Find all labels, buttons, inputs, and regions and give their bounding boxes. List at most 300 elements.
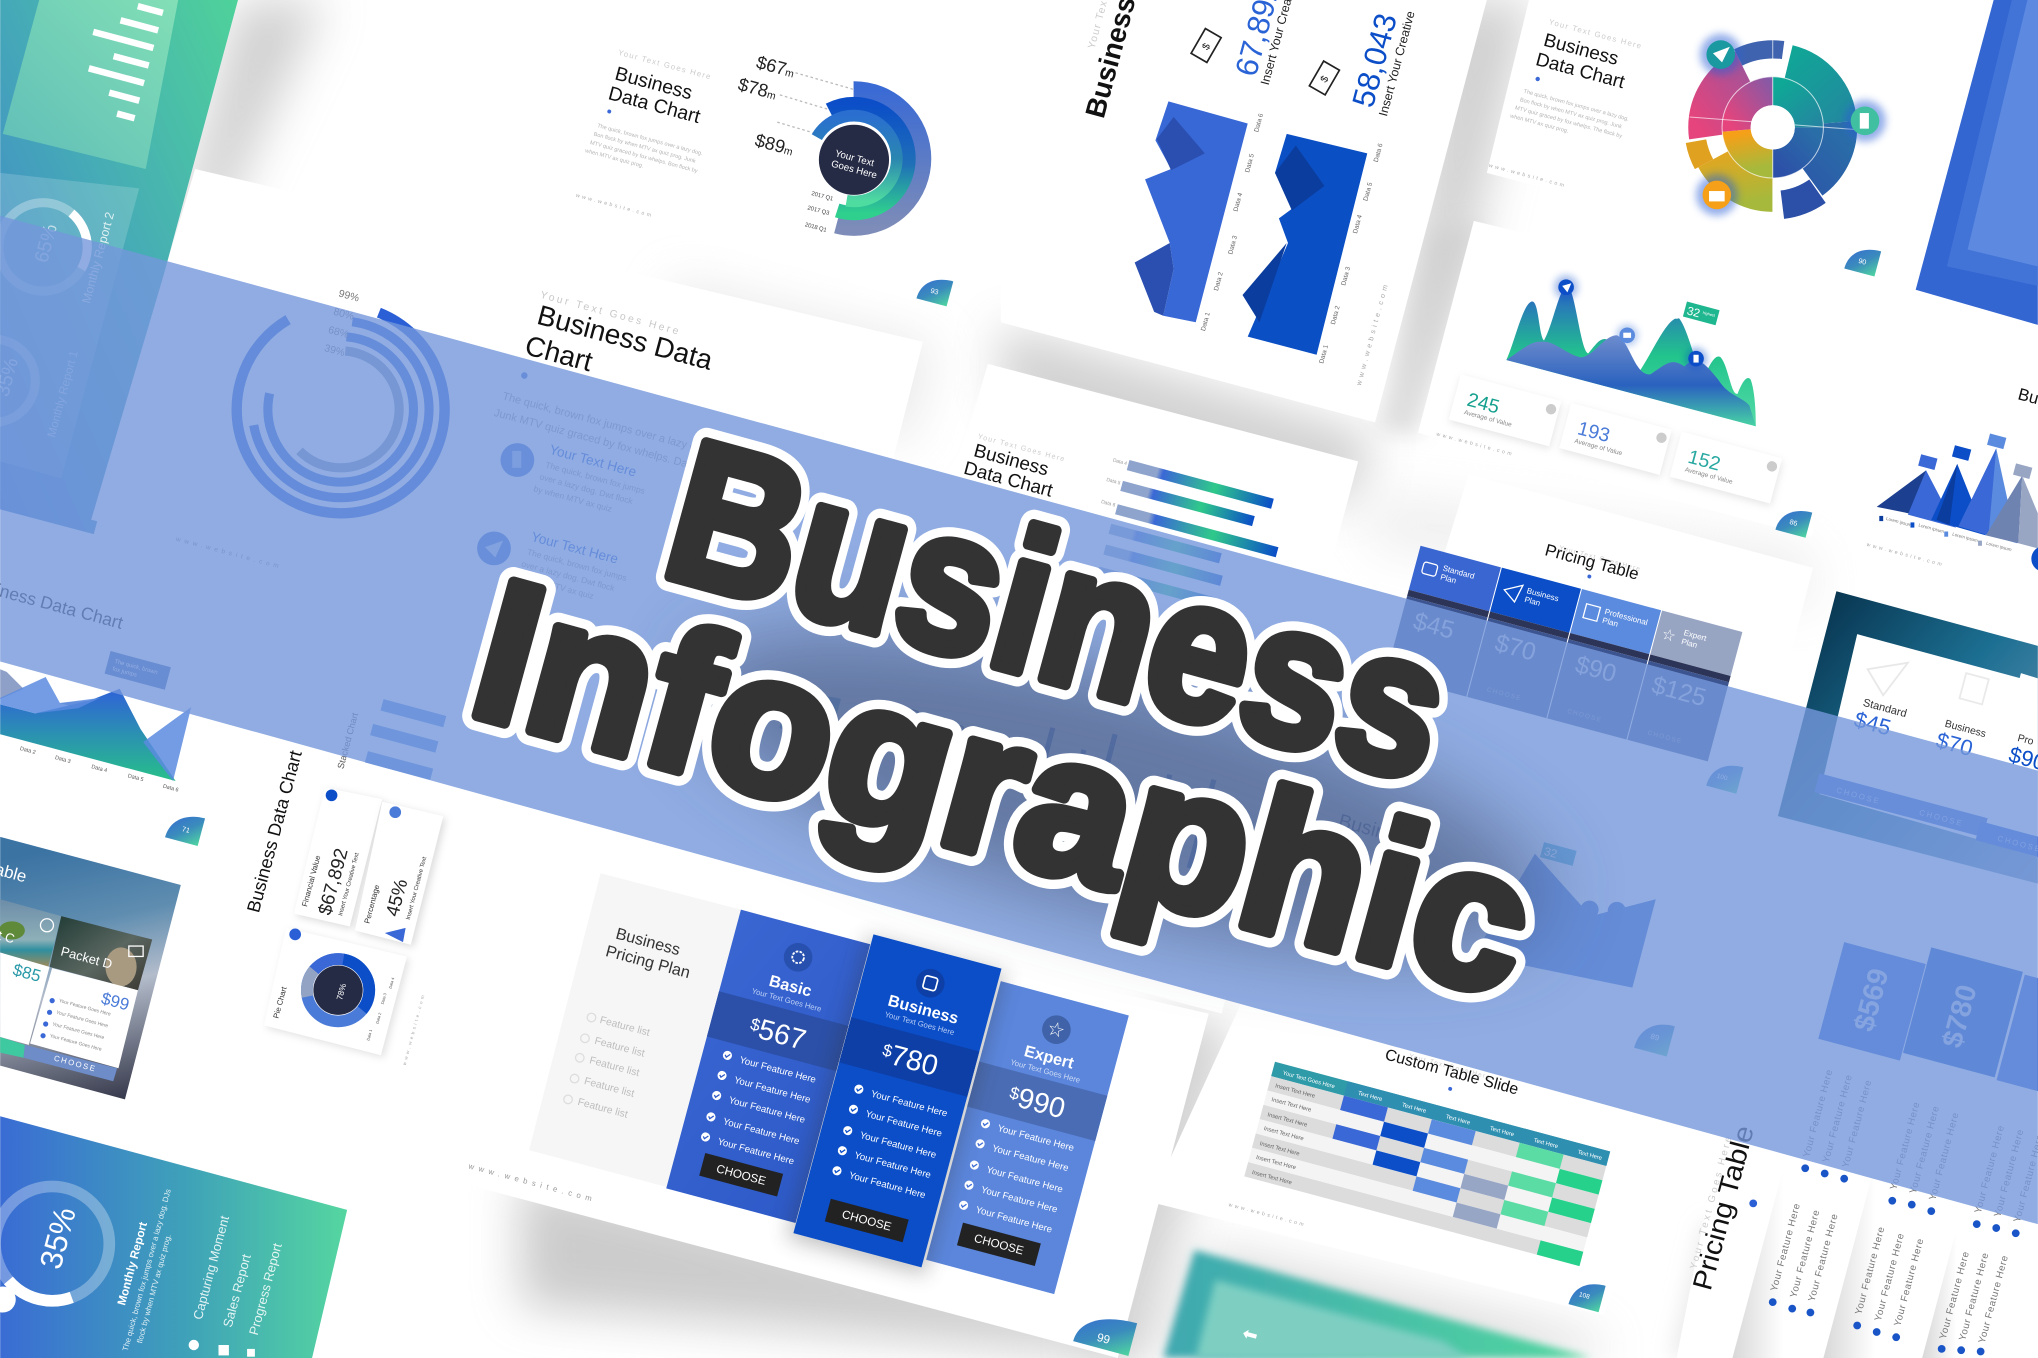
website: www.website.com [1436,431,1515,458]
subtitle: Your Text Goes Here [1688,1133,1735,1270]
choose bar third [1976,821,2038,860]
text: choose: CHOOSE [53,1054,98,1074]
legend: Lorem ipsum [1886,516,1912,528]
heading: Data Chart [1534,48,1628,92]
axis labels: 2017 Q1 [811,191,834,203]
plan: expert: Your Feature Here [974,1205,1053,1236]
page tab 89: 89 [1650,1032,1660,1043]
plan: business: Your Feature Here [870,1089,949,1120]
choose bar: CHOOSE [1835,786,1882,806]
marker: plane [1554,275,1578,299]
table [1244,1062,1610,1266]
plan: basic: Basic [767,972,814,1001]
choose bar: CHOOSE [1918,808,1964,828]
inner blue layer [1947,0,2038,286]
axis labels: Data 6 [1253,112,1265,133]
text: description: flock by when MTV ax quiz prog. [135,1233,173,1344]
panel: bars card [3,0,178,169]
column: standard: Plan [1439,572,1457,585]
marker circle [2031,546,2038,572]
axis labels [804,191,834,234]
panel: concentric rings slide [91,169,923,742]
photo: packet d [50,916,152,990]
plan: basic: 567 [755,1014,809,1057]
panel: sunburst slide [1487,0,1931,277]
table: Insert Text Here [1274,1083,1316,1100]
item 1 [533,441,651,521]
features list [40,998,112,1053]
choose bar [24,1045,117,1081]
feature list column [529,873,741,1188]
value bubbles [1918,433,2032,479]
features column 1: Your Feature Here [1892,1237,1926,1328]
legend: Lorem ipsum [1952,532,1979,543]
heading: Pricing Plan [604,942,692,982]
heading: Your Text Goes Here [977,432,1066,464]
pricing table [1386,546,1742,761]
photo: packet c [0,899,61,967]
card: pie chart: 78% [334,982,348,1001]
column: expert: Expert [1683,628,1708,643]
features column 1: Your Feature Here [1769,1202,1803,1293]
legend: Lorem ipsum [1918,522,1945,534]
panel: slide 71 area chart [0,572,228,846]
page tab 100: 100 [1716,773,1729,782]
features column 1: Your Feature Here [1957,1251,1991,1342]
stat card 193 [1559,403,1673,478]
website: www.website.com [1355,281,1390,387]
column: business: $70 [1492,630,1539,667]
icon: book [500,443,534,477]
text: standard: Standard [1862,697,1908,720]
nav: capturing moment: Capturing Moment [190,1214,232,1321]
heading: The quick, brown fox jumps over a lazy dog. [1523,89,1630,123]
page tab 93 [916,273,953,306]
page tab 93: 93 [930,287,939,297]
icon: thumb outline [1959,673,1989,704]
heading: Custom Table Slide [1383,1047,1520,1099]
column body 2 [1823,1051,1996,1358]
panel: horizontal bars slide [897,364,1358,780]
item 1: Your Text Here [548,442,638,480]
axis labels: Data 4 [1232,192,1244,212]
features list: Your Feature Goes Here [52,1021,105,1041]
heading: MTV quiz graced by fox whelps. The flock by [1514,105,1623,140]
table: Insert Text Here [1271,1097,1312,1114]
axis labels: Data 2 [1330,305,1342,325]
stat card 245: 245 [1465,389,1502,419]
heading: www.website.com [575,193,654,219]
green bar [0,1037,25,1058]
website: www.website.com [174,536,283,571]
table: Insert Text Here [1263,1126,1304,1142]
column: professional: CHOOSE [1566,708,1603,724]
plan: basic: Your Feature Here [722,1116,801,1147]
legend: Data 4 [387,976,395,989]
features column 1: Your Feature Here [1908,1105,1942,1195]
heading: Your Text Goes Here [617,48,713,81]
card: financial value: Financial Value [300,854,322,908]
axis labels [19,746,179,794]
bar chart [1033,728,1214,873]
icon: money note 2 [1309,61,1339,95]
heading: Pricing Table [1686,1122,1760,1293]
title line: Business: Business [646,398,1470,824]
panel: standard pricing slide [1778,591,2038,884]
area chart [0,669,191,781]
column: business: Business [1526,586,1560,603]
plan: business: Your Feature Here [853,1150,932,1181]
page tab 99: 99 [1095,1331,1111,1347]
column: expert: Plan [1680,637,1698,650]
column: professional [1558,602,1649,729]
area chart 2 [1243,134,1367,355]
area chart 1 [1135,101,1248,322]
axis labels: Data 5 [1244,153,1256,173]
plan: basic: Your Text Goes Here [751,986,822,1014]
table: Insert Text Here [1255,1155,1296,1171]
text: business [1933,718,1987,764]
choose bar [1814,773,1988,837]
bar chart [1097,460,1278,608]
column: standard [1396,559,1476,682]
panel: monthly report bottom left [0,1116,347,1358]
plan: business: CHOOSE [840,1208,893,1234]
page tab 94: 94 [801,706,817,722]
features column 1: Your Feature Here [1853,1225,1887,1316]
feature list: Feature list [598,1015,651,1039]
table colored cells [1317,1096,1606,1266]
table: Text Here [1577,1150,1602,1162]
features column 1: Your Feature Here [1801,1068,1836,1159]
panel: pyramid slide [1851,331,2038,585]
column: standard: Standard [1442,564,1476,581]
column: standard: CHOOSE [1406,665,1442,681]
column body 1 [1732,1038,1903,1358]
heading [604,923,697,982]
panel: far right blue slide [1916,0,2038,325]
donut chart: Goes Here [830,159,878,181]
features column 1: Your Feature Here [1888,1101,1923,1191]
table: Text Here [1357,1091,1383,1103]
icon: money note 1: $ [1201,42,1213,52]
plan: expert: Your Feature Here [985,1165,1064,1195]
table: Text Here [1489,1126,1515,1138]
heading: The quick, brown fox jumps over a lazy dog. [596,123,704,157]
features column 1: Your Feature Here [1788,1208,1823,1299]
heading: Business [614,925,682,959]
heading: Business [1336,810,1418,852]
caption: Insert Your Creative [1376,9,1418,118]
plan: business: Your Feature Here [859,1130,937,1161]
legend: Data 3 [380,992,387,1005]
column body 3 [1922,1080,2038,1358]
page tab 86: 86 [1789,518,1798,528]
stacked bars [365,699,446,780]
website: www.website.com [1228,1202,1307,1229]
plan: expert: Your Feature Here [980,1185,1059,1216]
stat card 245: Average of Value [1463,409,1513,429]
icon: plane [477,532,511,565]
axis labels: Data 3 [1340,266,1352,286]
marker: book [1686,348,1706,369]
flag: 32 [1543,845,1558,861]
leader lines [777,73,868,133]
card: pie chart: Pie Chart [272,985,289,1019]
heading: Business Data [534,299,716,376]
nav: sales report: Sales Report [220,1252,254,1329]
feature list: Feature list [588,1055,641,1079]
title banner band [0,216,2038,1224]
plan: business: Your Feature Here [848,1170,927,1201]
bar labels: Data 4 [1112,457,1128,467]
bar labels [1100,457,1128,509]
axis labels: Data 3 [54,755,71,765]
features column 1: Your Feature Here [1821,1073,1855,1164]
panel: vertical bar slide under title [832,676,1280,1014]
value: 78m: $78m [736,74,779,104]
heading: Junk MTV quiz graced by fox whelps. Dad [493,407,695,472]
panel: custom table slide [1150,1003,1677,1315]
donut chart [294,946,382,1034]
axis labels: Data 1 [1318,344,1330,364]
stat card 152 [1669,431,1783,506]
features list: Your Feature Goes Here [56,1010,109,1029]
card: pie chart [264,928,410,1058]
flag: 32 highest value: 32 [1685,304,1701,320]
column: expert: ☆ [1660,626,1678,646]
icon: plane outline [1868,663,1908,695]
stat card 193: 193 [1575,417,1612,447]
panel: pricing table slide [1386,474,1813,819]
card: third [1978,673,2038,845]
column 2: $780 [1936,981,1984,1051]
features column 1: Your Feature Here [1938,1250,1972,1341]
panel: ring card [0,173,139,478]
plan: expert: 990 [1014,1082,1069,1125]
column 3 [1997,975,2038,1105]
website: www.website.com [1866,542,1945,568]
axis labels: Data 5 [1362,181,1374,202]
plan: expert: Your Feature Here [991,1143,1070,1174]
item 1: The quick, brown fox jumps [544,460,646,496]
text: business: Business [1943,719,1987,740]
axis labels [1200,112,1385,364]
axis labels: Data 2 [19,746,36,756]
page tab 108 [1568,1278,1606,1312]
panel: slide business area charts [1001,0,1487,422]
plan: expert: $ [1008,1083,1022,1104]
axis labels: 2017 Q3 [807,205,830,217]
plan: basic [666,910,870,1223]
heading [572,46,724,228]
column: expert: CHOOSE [1647,730,1683,746]
text: business: $70 [1933,727,1976,761]
ring labels: 99% [337,289,360,305]
column: business: CHOOSE [1486,686,1522,703]
axis labels: 2018 Q1 [804,222,827,234]
plan: expert: CHOOSE [973,1232,1025,1258]
label: monthly report 1: Monthly Report 1 [45,349,81,439]
panel: slide 93 donut [559,0,1001,308]
marker [1580,901,1599,919]
nav: progress report: Progress Report [246,1241,285,1337]
feature list: Feature list [583,1076,635,1100]
donut: 65 percent [0,203,87,291]
heading: Business [905,705,987,747]
features column 1: Your Feature Here [1873,1232,1907,1322]
axis labels: Data 2 [1213,271,1225,292]
pyramid chart [1877,448,2038,548]
page tab 90: 90 [1857,257,1867,267]
panel: data cards slide [195,699,484,1080]
feature list: Feature list [593,1036,646,1060]
column 1 [1818,942,1926,1061]
features column 1: Your Feature Here [1807,1212,1841,1303]
icon: book [1844,100,1886,142]
price 85: $85 [11,960,43,986]
label: monthly report 2: Monthly Report 2 [79,210,117,305]
heading: Your Text Goes Here [1558,545,1642,573]
axis labels: Data 3 [1227,235,1239,255]
heading: The quick, brown fox jumps over a lazy dog. [501,390,712,458]
stat card 245 [1448,374,1563,449]
panel: monthly report left [0,0,238,534]
plan: business: 780 [887,1039,941,1083]
heading [493,286,740,475]
photo: person [105,947,137,986]
page tab 71: 71 [181,825,191,835]
page tab 94 [779,685,841,742]
photo: tree [0,921,25,940]
plan: business: $ [881,1040,895,1061]
heading [1324,809,1428,880]
website: www.website.com [402,992,426,1066]
stacked chart label: Stacked Chart [336,711,360,770]
item 2: over a lazy dog. Dwt flock [520,559,616,593]
bar chart: white bars [74,0,168,121]
marker: case [1617,325,1638,346]
band shading behind title [661,565,1575,1020]
icon: money note 2: $ [1319,74,1331,85]
column: standard: $45 [1410,608,1457,645]
table: Insert Text Here [1267,1112,1308,1129]
flag: 32 highest value [1672,299,1720,329]
heading: Your Text Goes Here [1548,17,1643,51]
page tab 99 [1073,1309,1137,1356]
feature list: Feature list [576,1097,629,1121]
column: business [1477,580,1560,705]
legend: Data 2 [374,1012,382,1024]
axis labels: Data 5 [127,773,144,783]
plan: basic: $ [748,1014,763,1035]
plan: expert: ☆ [1045,1017,1067,1043]
stat card 152: 152 [1686,446,1723,476]
page tab 86 [1775,505,1812,538]
inner light layer [1968,0,2038,266]
panel: mountain area slide [1418,221,1864,538]
ring labels: 39% [323,343,346,359]
legend [365,976,395,1041]
column: expert [1635,623,1722,748]
title: Business Infographic [453,398,1555,1039]
plan: basic: Your Feature Here [738,1055,817,1086]
column: professional: $90 [1572,651,1619,688]
icon: money note 1 [1191,29,1221,62]
table: Insert Text Here [1259,1141,1300,1158]
table: Insert Text Here [1251,1170,1292,1186]
donut: 35 percent [0,1186,109,1313]
tooltip [105,651,171,690]
card: financial value: $67,892 [314,846,352,917]
panel: mountain chart slide under band [1324,793,1755,1079]
panel: packet slide [0,837,181,1099]
plan: business: Your Text Goes Here [884,1010,955,1037]
column: expert: $125 [1649,672,1709,712]
flag [1540,842,1577,866]
inner light card [1196,1280,1469,1358]
axis labels: Data 4 [1352,214,1364,234]
heading: Pricing Table [1543,540,1641,584]
radial bar chart [205,274,476,545]
heading: when MTV ax quiz prog. [583,148,644,170]
value: 67m: $67m [754,52,797,82]
card left [0,953,50,1045]
panel: pricing plan slide [436,873,1209,1358]
features list: Your Feature Goes Here [58,998,112,1018]
axis labels: Data 6 [1373,142,1385,163]
area chart [1474,854,1656,988]
plan: basic: Your Feature Here [727,1095,806,1126]
website: www.website.com [467,1161,597,1204]
plan: business: Your Feature Here [864,1109,943,1140]
page tab 100 [1706,759,1743,794]
column: business: Plan [1523,595,1541,608]
bar labels: Data 6 [1100,499,1116,509]
heading: Data Chart [962,457,1056,501]
features column 1: Your Feature Here [1840,1079,1874,1169]
heading [962,431,1066,502]
bar labels: Data 5 [1106,477,1121,487]
ring labels: 68% [327,325,350,341]
heading: Your Text Goes Here [1408,1053,1492,1081]
table: Text Here [1533,1138,1559,1150]
dot [1749,1199,1757,1207]
ring labels: 80% [332,307,355,323]
panel: blurred green slide bottom [1163,1250,1592,1358]
axis labels: Data 6 [162,784,179,794]
table: Text Here [1445,1114,1471,1127]
icon: monitor [129,946,143,956]
plan: business: Business [886,992,960,1028]
title line: Business: Business [646,398,1470,824]
page tab 71 [165,810,205,846]
heading: MTV quiz graced by fox whelps. Bon flock by [589,140,698,175]
features column 1: Your Feature Here [1973,1124,2007,1215]
panel: vertical pricing columns slide [1677,897,2038,1358]
tooltip: The quick, brown [114,659,158,676]
price 99: $99 [99,989,131,1014]
heading: Data Chart [606,82,703,128]
column: professional: Plan [1601,616,1619,629]
text: standard [1852,696,1908,743]
item 2: Your Text Here [530,529,620,567]
table: Text Here [1401,1103,1427,1115]
stat card 152: Average of Value [1684,466,1734,486]
donut: 65 percent: 65% [31,222,62,265]
card: financial value: Insert Your Creative Text [338,852,361,917]
card: financial value [294,788,385,929]
